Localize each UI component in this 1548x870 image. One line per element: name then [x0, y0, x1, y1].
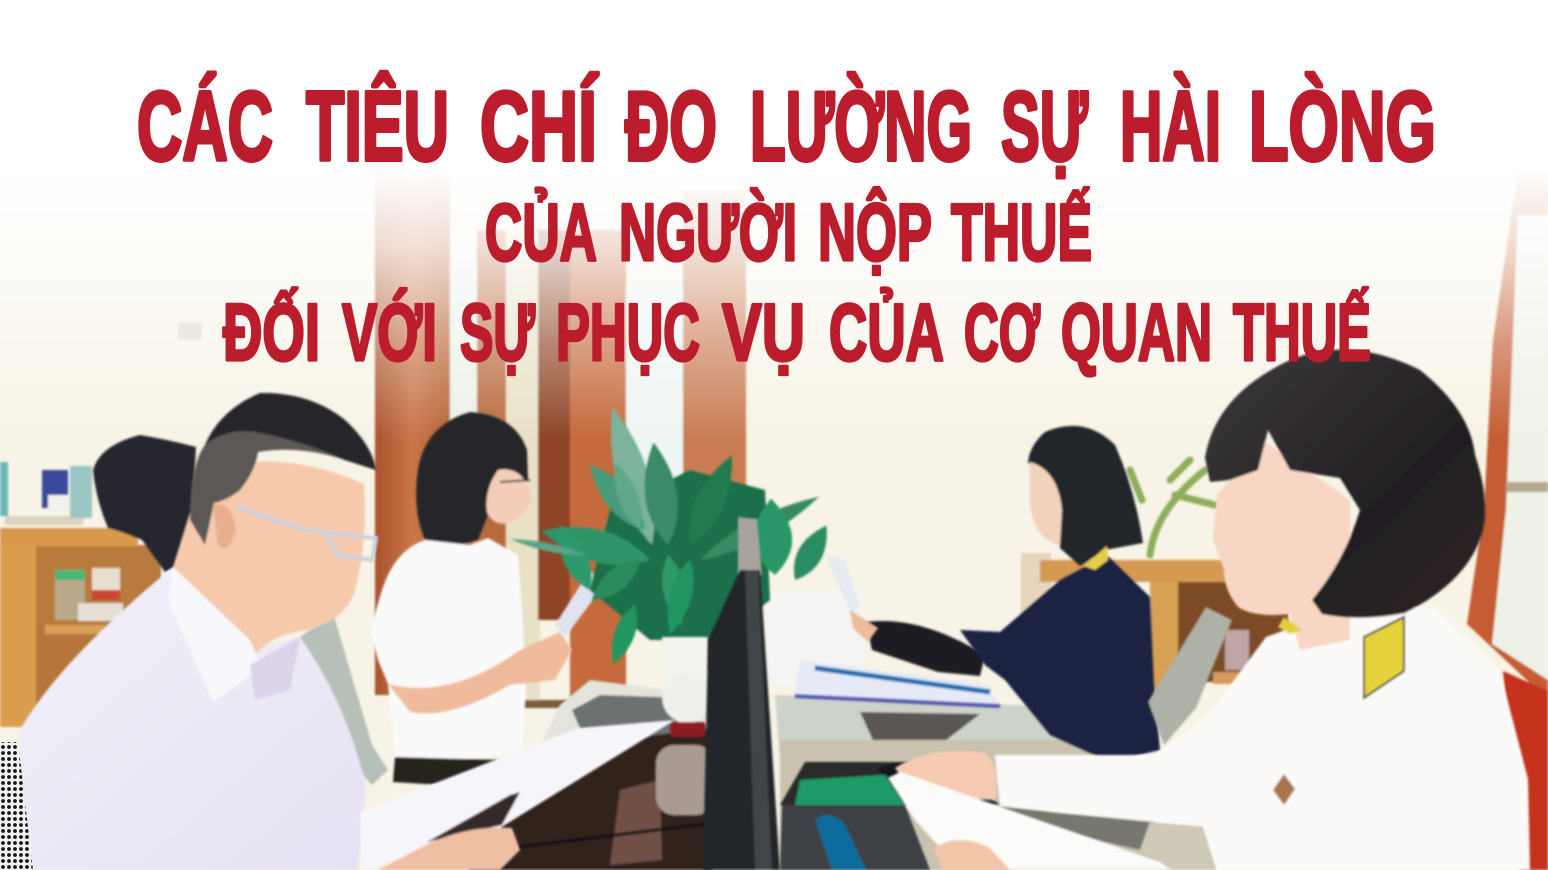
title line 3: VỚI	[342, 287, 437, 378]
person: woman in navy uniform	[850, 426, 1160, 762]
wall switch	[178, 322, 202, 340]
title line 3: CƠ	[964, 288, 1040, 378]
papers held by man	[360, 720, 675, 870]
person: woman in white blouse	[370, 412, 604, 785]
title line 2	[485, 187, 1092, 278]
left wooden cabinet	[0, 462, 161, 727]
mesh chair	[1148, 607, 1232, 745]
title line 1: CHÍ	[480, 71, 599, 181]
title line 1: ĐO	[625, 71, 717, 181]
person: woman in tax uniform in front	[888, 350, 1530, 870]
title line 1: CÁC	[137, 71, 273, 181]
title line 3: SỰ	[460, 288, 535, 378]
title line 1: HÀI	[1120, 71, 1221, 181]
title line 3	[223, 287, 1371, 378]
title line 3: PHỤC	[556, 288, 700, 378]
title line 3: CỦA	[829, 287, 944, 378]
computer monitor	[703, 517, 780, 870]
wooden doors	[375, 175, 746, 708]
stack of papers and telephone	[765, 555, 1000, 706]
right door frame	[1467, 170, 1548, 870]
title line 1: TIÊU	[306, 71, 449, 181]
title line 2: NỘP	[818, 187, 932, 278]
white fade at top of photo	[0, 0, 1548, 440]
title line 1: SỰ	[1001, 71, 1088, 181]
plant on desk	[509, 402, 837, 668]
white pot and crystal ball	[662, 637, 712, 737]
title line 2: THUẾ	[951, 187, 1092, 278]
title line 2: NGƯỜI	[619, 187, 797, 278]
title line 3: THUẾ	[1233, 287, 1371, 378]
title line 1	[137, 71, 1436, 181]
keyboard and mouse pad	[780, 762, 1000, 870]
mesh chair behind man	[300, 613, 388, 785]
back plant on right	[1130, 460, 1215, 555]
title line 2: CỦA	[485, 187, 597, 278]
title line 3: ĐỐI	[223, 287, 320, 378]
title line 1: LÒNG	[1249, 71, 1436, 181]
person: man with glasses	[19, 393, 376, 870]
title line 3: VỤ	[722, 288, 805, 378]
title	[137, 71, 1436, 378]
title line 3: QUAN	[1061, 288, 1212, 378]
dark jacket on rack	[93, 435, 196, 572]
right back cabinet	[1021, 553, 1288, 692]
title line 1: LƯỜNG	[750, 71, 972, 181]
dotted chair back	[0, 742, 33, 870]
desk: glass top	[440, 680, 1217, 870]
